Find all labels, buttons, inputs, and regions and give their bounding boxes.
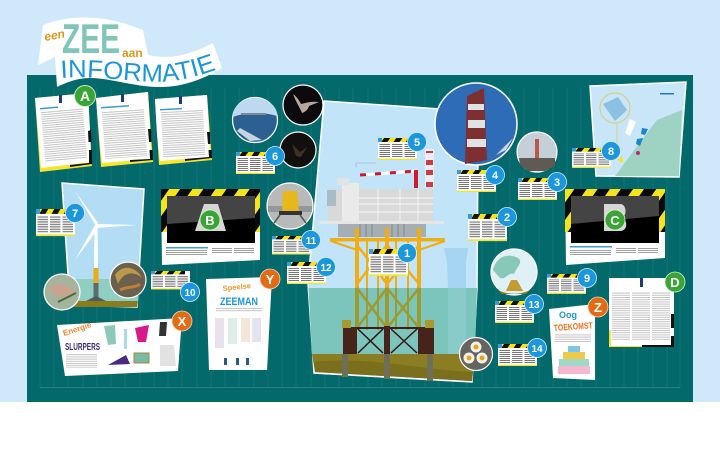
label card 8: [572, 142, 620, 168]
badge X: X: [178, 314, 187, 329]
document 1: [35, 93, 92, 172]
badge C: C: [610, 213, 620, 228]
banner shape: [38, 18, 222, 87]
label card 1: 1: [404, 248, 410, 260]
foundation: [342, 320, 434, 381]
label card 8: 8: [608, 146, 614, 158]
panel X: energy slurpers: [57, 311, 192, 376]
label card 1: [369, 244, 416, 276]
platform topside: [319, 178, 444, 237]
label card 13: 13: [528, 300, 540, 311]
panel Y: zeeman: [206, 269, 280, 370]
panel: offshore platform scene: [308, 101, 478, 382]
title banner: [38, 15, 222, 87]
photo: anemones left: [44, 274, 80, 310]
panel Z: oog op toekomst: TOEKOMST: [553, 320, 593, 333]
label card 14: [498, 338, 546, 366]
label card 12: 12: [320, 263, 332, 274]
panel Y: zeeman: ZEEMAN: [220, 296, 258, 308]
label card 4: [457, 166, 504, 192]
badge B: B: [205, 213, 215, 228]
label card 9: 9: [584, 273, 590, 285]
label card 11: [272, 230, 320, 254]
document 3: [155, 95, 212, 165]
board: [27, 75, 693, 402]
photo: wave with house: [491, 249, 537, 295]
cake: [568, 346, 580, 352]
photo: tower on land: [517, 132, 557, 172]
panel: wind turbine: [62, 183, 144, 307]
heading: Speelse: [222, 281, 251, 293]
red and white mast: [425, 149, 434, 187]
water: [308, 288, 477, 354]
heading: Energie: [62, 320, 93, 338]
panel A: three documents: [35, 86, 212, 172]
label card 9: [547, 268, 596, 294]
label card 3: [518, 172, 566, 200]
photo 6: ship: [232, 98, 278, 142]
label card 13: [495, 294, 544, 323]
label card 3: 3: [554, 177, 560, 189]
title: ZEE: ZEE: [62, 15, 120, 62]
background tower: [444, 248, 468, 354]
panel B: screen with sheet: [161, 189, 260, 265]
label card 6: [236, 146, 284, 174]
label card 14: 14: [531, 344, 543, 355]
label card 10: [151, 271, 200, 302]
label card 2: [468, 208, 516, 241]
icon list: [215, 318, 224, 348]
panel C: screen with sheet: [565, 189, 665, 265]
photo: anemones right: [110, 262, 146, 298]
small figures: [224, 358, 249, 365]
yellow jacket: [330, 228, 445, 288]
panel X: energy slurpers: SLURPERS: [65, 342, 100, 353]
label card 7: 7: [72, 208, 78, 220]
photo: yellow device: [267, 183, 313, 229]
label card 12: [287, 258, 336, 284]
label card 5: [378, 132, 426, 160]
badge Y: Y: [266, 272, 275, 287]
label card 4: 4: [492, 170, 499, 182]
title: een: een: [43, 27, 66, 44]
photo: power cable cross-section: [460, 338, 492, 370]
label card 2: 2: [504, 212, 510, 224]
title: aan: aan: [122, 46, 143, 60]
crane: [356, 163, 418, 188]
badge D: D: [670, 275, 680, 290]
seabed: [312, 354, 475, 381]
label card 10: 10: [184, 288, 196, 299]
badge A: [74, 86, 96, 106]
appliance icons: [104, 322, 176, 366]
label card 5: 5: [414, 137, 420, 149]
badge Z: Z: [594, 300, 602, 315]
title: INFORMATIE: INFORMATIE: [62, 54, 216, 82]
photo: red mast on blue sky: [435, 83, 517, 165]
label card 6: 6: [272, 151, 278, 163]
submerged jacket: [357, 288, 419, 330]
map panel 8: [590, 82, 686, 177]
label card 11: 11: [306, 236, 317, 247]
panel D: document: [609, 272, 685, 347]
label card 7: [36, 204, 84, 236]
scene background: [308, 101, 478, 382]
heading: Oog: [559, 310, 577, 320]
badge A: A: [80, 88, 90, 104]
photo: moth: [280, 132, 316, 168]
panel Z: oog op toekomst: [549, 297, 608, 380]
photo: bat: [283, 85, 323, 125]
document 2: [96, 92, 153, 167]
